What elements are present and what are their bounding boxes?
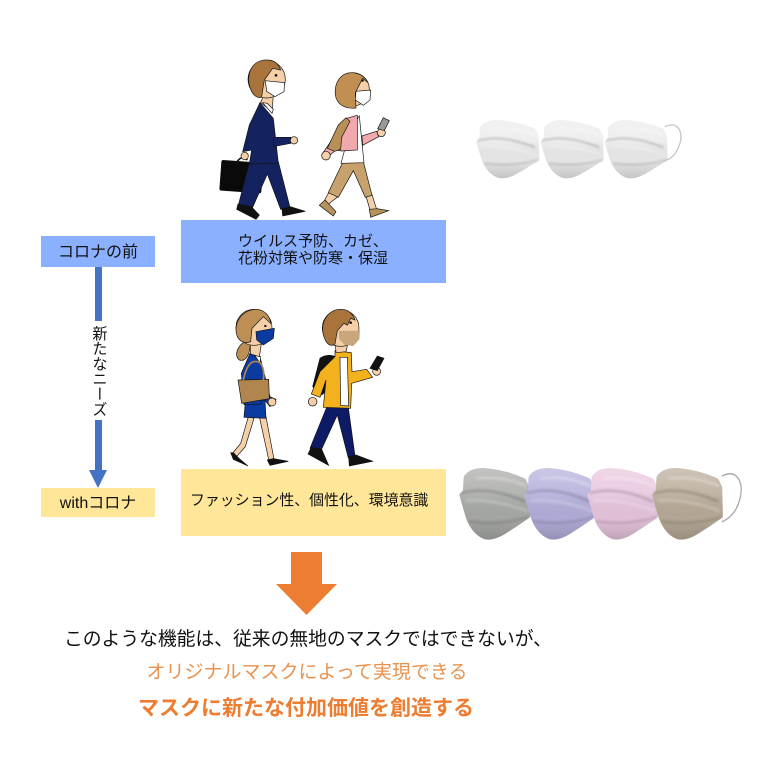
illustration: fashionable woman and man walking — [231, 309, 384, 466]
conclusion text: オリジナルマスクによって実現できる — [146, 661, 468, 683]
label: with corona — [41, 488, 155, 517]
conclusion text — [64, 628, 552, 720]
white masks row — [476, 120, 681, 178]
woman in blue — [231, 309, 288, 466]
arrow: new needs — [89, 267, 108, 488]
coloured masks row — [459, 468, 741, 540]
panel: with-corona needs: ファッション性、個性化、環境意識 — [190, 492, 428, 509]
conclusion text: マスクに新たな付加価値を創造する — [138, 697, 474, 720]
illustration: businessman and woman walking — [220, 60, 389, 219]
label: with corona: withコロナ — [59, 495, 136, 512]
woman — [319, 73, 389, 217]
panel: pre-corona needs: ウイルス予防、カゼ、 — [238, 233, 388, 250]
man in yellow — [308, 309, 384, 466]
conclusion text: このような機能は、従来の無地のマスクではできないが、 — [64, 628, 552, 649]
panel: pre-corona needs: 花粉対策や防寒・保湿 — [238, 250, 388, 267]
panel: with-corona needs — [181, 469, 446, 536]
man — [220, 60, 305, 219]
label: before corona — [41, 236, 155, 267]
label: before corona: コロナの前 — [58, 243, 138, 261]
panel: pre-corona needs — [181, 220, 446, 283]
arrow: new needs: 新たなニーズ — [90, 326, 108, 417]
arrow: result — [276, 552, 337, 615]
